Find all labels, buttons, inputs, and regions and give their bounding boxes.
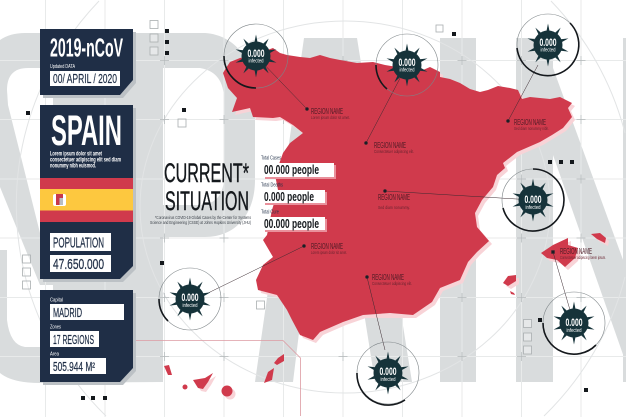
region labels [311, 107, 606, 286]
stats: totals: Total Cure [261, 210, 279, 216]
virus badge 2: infected [400, 68, 415, 74]
heading: current situation: Science and Engineering (CSSE) at Johns Hopkins University (JHU) [150, 220, 251, 225]
panel: country facts: MADRID [53, 305, 82, 320]
region labels: REGION NAME [311, 242, 343, 251]
virus badge 3: 0.000 [540, 37, 556, 49]
heading: current situation: *Coronavirus COVID-19 Global Cases by the Center for Systems [155, 215, 252, 220]
flag of Spain [40, 178, 133, 222]
panel: Spain: consectetuer adipiscing elit sed diam [50, 158, 121, 164]
Balearic Islands [503, 233, 606, 295]
region labels: Consectetuer adipiscing elit. [374, 149, 414, 154]
panel: date: 2019-nCoV [50, 32, 123, 62]
heading: current situation: CURRENT* [164, 158, 249, 188]
region labels: Lorem ipsum dolor sit amet. [311, 250, 347, 255]
panel: Spain: 47.650.000 [53, 256, 104, 273]
panel: country facts: 505.944 M² [53, 359, 95, 374]
panel: country facts: Zones [50, 324, 61, 330]
panel: date: Updated DATA [50, 64, 75, 70]
stats: totals: 00.000 people [264, 217, 319, 231]
grid crosses [160, 56, 586, 361]
virus badge 1 [224, 24, 288, 88]
virus badge 3: infected [540, 48, 556, 54]
map: Spain shadow [196, 51, 609, 400]
virus badge 7: infected [380, 377, 396, 383]
stats: totals [261, 156, 336, 232]
virus badge 6: 0.000 [182, 292, 198, 304]
panel: Spain: SPAIN [51, 107, 122, 155]
panel: Spain: nonummy nibh euismod. [50, 164, 96, 170]
virus badge 7: 0.000 [380, 366, 396, 378]
virus badge 3 [517, 14, 579, 76]
virus badge 2 [376, 34, 438, 96]
region labels: REGION NAME [378, 193, 410, 202]
virus badge 6: infected [182, 303, 198, 309]
region labels: REGION NAME [311, 107, 343, 116]
panel: Spain [40, 105, 136, 282]
heading: current situation [150, 158, 252, 225]
stats: totals: Total Cases [261, 156, 281, 162]
virus badge 2: 0.000 [398, 57, 416, 69]
region labels: Sed diam nonummy. [378, 205, 410, 210]
panel: Spain: Lorem ipsum dolor sit amet [50, 152, 102, 158]
Canary Islands [164, 354, 284, 396]
region labels: Sed diam nonummy nibh. [514, 126, 549, 131]
panel: date: 00/ APRIL / 2020 [53, 71, 117, 86]
panel: country facts: Capital [50, 298, 63, 304]
region labels: REGION NAME [372, 273, 404, 282]
region labels: REGION NAME [514, 118, 546, 127]
panel: Spain: POPULATION [53, 234, 104, 252]
region labels: Consectetuer adipiscing elit. [372, 281, 412, 286]
virus badge 7 [357, 342, 419, 405]
virus badge 4: 0.000 [524, 194, 542, 206]
hollow squares [22, 20, 532, 354]
virus badge 4 [502, 169, 564, 231]
virus badge 4: infected [526, 205, 541, 211]
virus badge 5 [543, 292, 605, 354]
panel: country facts [40, 290, 136, 385]
region labels: REGION NAME [560, 247, 592, 256]
virus badge 5: 0.000 [566, 317, 582, 329]
panel: date [40, 29, 136, 98]
stats: totals: 0.000 people [264, 190, 314, 204]
virus badge 6 [159, 268, 221, 330]
panel: country facts: Area [50, 352, 60, 358]
stats: totals: Total Deaths [261, 182, 283, 188]
small black squares [26, 29, 588, 400]
region labels: Lorem ipsum dolor sit amet. [311, 115, 350, 120]
virus badge 1: 0.000 [248, 48, 264, 60]
connectors [204, 56, 570, 350]
virus badge 1: infected [248, 58, 264, 64]
map: Spain mainland [223, 48, 572, 340]
stats: totals: 00.000 people [264, 163, 319, 177]
red outline frame around Canary Islands [133, 340, 300, 416]
heading: current situation: SITUATION [165, 186, 249, 216]
region labels: REGION NAME [374, 141, 406, 150]
virus badge 5: infected [566, 328, 582, 334]
panel: country facts: 17 REGIONS [53, 332, 94, 347]
